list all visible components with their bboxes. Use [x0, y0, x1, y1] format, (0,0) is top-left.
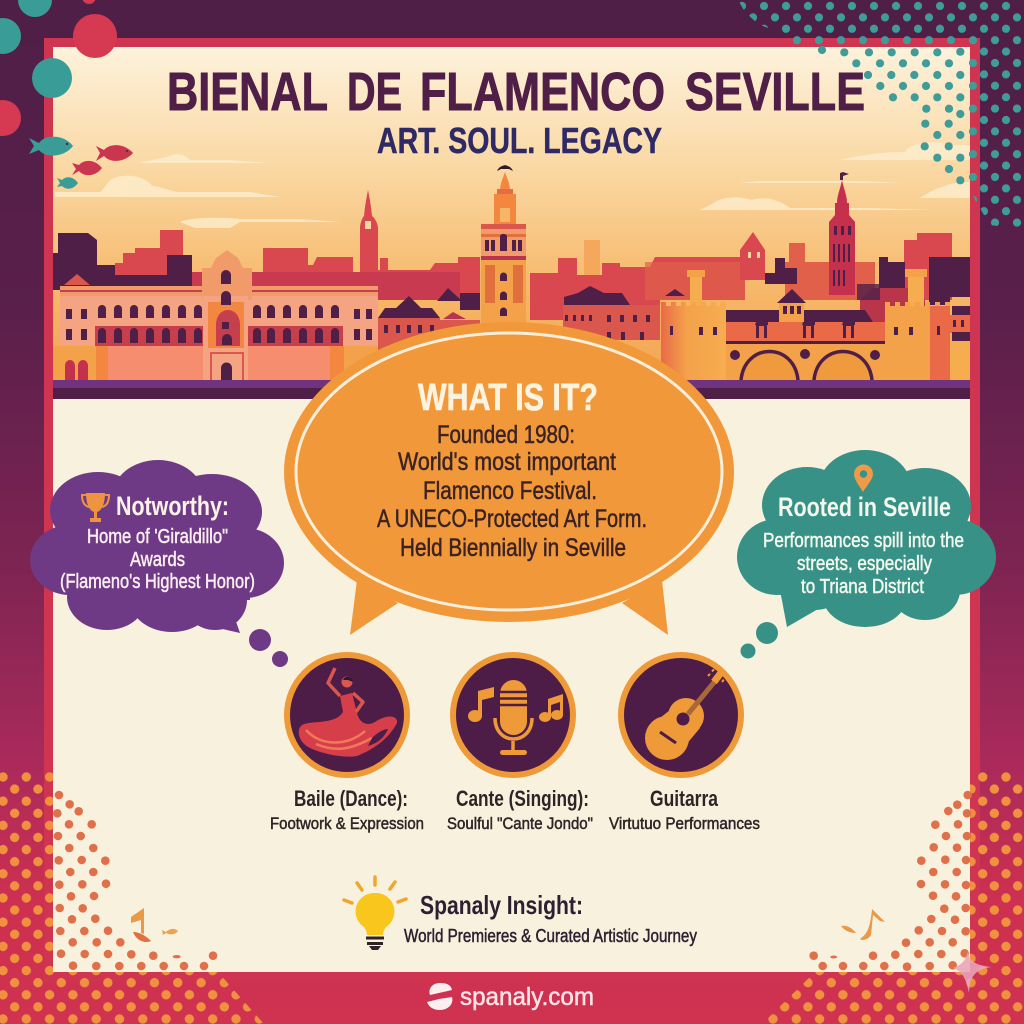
- fish: [29, 137, 133, 189]
- text: rooted description: to Triana District: [801, 576, 924, 598]
- castle right: [885, 269, 950, 380]
- river band: [53, 380, 970, 399]
- subtitle: ART. SOUL. LEGACY: [377, 120, 662, 161]
- sparkle: [953, 951, 991, 993]
- text: what is it description: World's most important: [398, 448, 616, 476]
- label: baile: [270, 786, 424, 833]
- skyline: [53, 165, 970, 381]
- text: notworthy description: Awards: [130, 549, 185, 571]
- sky: [53, 47, 970, 382]
- icon: microphone: [453, 655, 573, 775]
- bridge: [726, 341, 885, 380]
- palace: [53, 250, 378, 380]
- clouds: [55, 142, 970, 228]
- text: rooted description: Performances spill into the: [763, 530, 964, 552]
- panel: rooted in seville thought cloud: [737, 450, 996, 658]
- giralda tower: [481, 165, 526, 330]
- palace central portal: [202, 250, 252, 380]
- teal halftone dots: [738, 0, 1024, 228]
- title: SEVILLE: [685, 62, 865, 122]
- icon: guitar: [621, 655, 741, 775]
- text: rooted description: [763, 530, 964, 598]
- bottom-right halftone dots: [762, 770, 1024, 1024]
- text: notworthy description: Home of 'Giraldillo": [87, 526, 228, 548]
- heading: notworthy: Notworthy:: [116, 491, 229, 521]
- text: what is it description: [377, 421, 647, 562]
- heading: rooted in seville: Rooted in Seville: [778, 492, 951, 522]
- label: cante: Soulful "Cante Jondo": [447, 814, 593, 833]
- title: FLAMENCO: [420, 62, 665, 122]
- back buildings: [53, 190, 970, 320]
- text: rooted description: streets, especially: [797, 553, 932, 575]
- music notes: [468, 687, 563, 722]
- castle left: [661, 270, 726, 380]
- text: notworthy description: (Flameno's Highest Honor): [60, 571, 255, 593]
- panel: what is it speech bubble: [284, 322, 734, 635]
- logo: spanaly.com: spanaly.com: [460, 983, 594, 1011]
- decorative circles: [0, 0, 117, 136]
- text: what is it description: Founded 1980:: [437, 421, 575, 449]
- title: BIENAL: [167, 62, 328, 122]
- label: cante: [447, 786, 593, 833]
- text: what is it description: Flamenco Festival.: [423, 477, 597, 505]
- text: what is it description: Held Biennially in Seville: [400, 534, 626, 562]
- label: baile: Footwork & Expression: [270, 814, 424, 833]
- text: notworthy description: [60, 526, 255, 593]
- icon: map pin: [854, 464, 873, 492]
- label: baile: Baile (Dance):: [294, 786, 408, 811]
- title: DE: [347, 62, 402, 122]
- palace windows: [66, 309, 372, 340]
- icon: light bulb: [344, 877, 406, 950]
- corner notes and fish right: [841, 909, 885, 940]
- icon: trophy: [82, 493, 109, 522]
- panel: notworthy thought cloud: [30, 460, 288, 667]
- right red tower: [829, 172, 855, 295]
- icon: flamenco dancer: [287, 655, 407, 775]
- center left houses: [378, 286, 685, 350]
- label: guitarra: Guitarra: [650, 786, 719, 811]
- label: guitarra: Virtutuo Performances: [609, 814, 760, 833]
- label: guitarra: [609, 786, 760, 833]
- mid buildings right: [726, 284, 970, 381]
- label: cante: Cante (Singing):: [456, 786, 589, 811]
- heading: what is it: WHAT IS IT?: [418, 377, 598, 419]
- title: [167, 62, 865, 122]
- text: what is it description: A UNECO-Protected Art Form.: [377, 505, 647, 533]
- callout: spanaly insight: World Premieres & Curated Artistic Journey: [404, 926, 697, 946]
- callout: spanaly insight: [404, 890, 697, 946]
- corner notes and fish left: [131, 908, 178, 942]
- bottom-left halftone dots: [0, 770, 264, 1024]
- callout: spanaly insight: Spanaly Insight:: [420, 890, 583, 920]
